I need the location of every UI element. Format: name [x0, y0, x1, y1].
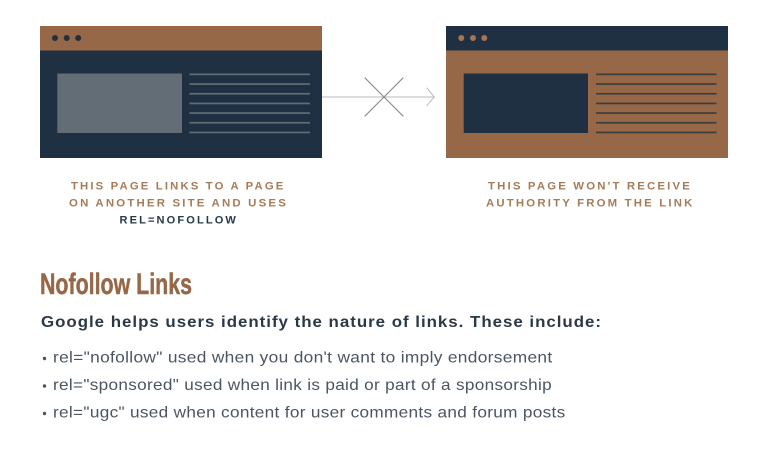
panel: receiving page browser window: [446, 26, 728, 158]
subheading: Google helps users identify the nature of links. These include:: [41, 314, 602, 331]
bullet: ugc: rel="ugc" used when content for user comments and forum posts: [53, 404, 566, 422]
caption: receiving page: AUTHORITY FROM THE LINK: [486, 198, 694, 210]
caption: linking page: [69, 180, 288, 226]
caption: receiving page: [486, 180, 694, 210]
caption: linking page: REL=NOFOLLOW: [120, 214, 238, 226]
bullet: sponsored: rel="sponsored" used when link is paid or part of a sponsorship: [53, 377, 552, 394]
heading: Nofollow Links: [40, 268, 192, 301]
bullet: nofollow: rel="nofollow" used when you don't want to imply endorsement: [53, 350, 553, 366]
caption: receiving page: THIS PAGE WON'T RECEIVE: [488, 180, 692, 192]
panel: linking page browser window: [40, 26, 322, 158]
caption: linking page: ON ANOTHER SITE AND USES: [69, 198, 288, 210]
arrow: blocked link between pages: [322, 78, 434, 116]
caption: linking page: THIS PAGE LINKS TO A PAGE: [71, 180, 286, 192]
bullet list: [43, 350, 566, 422]
